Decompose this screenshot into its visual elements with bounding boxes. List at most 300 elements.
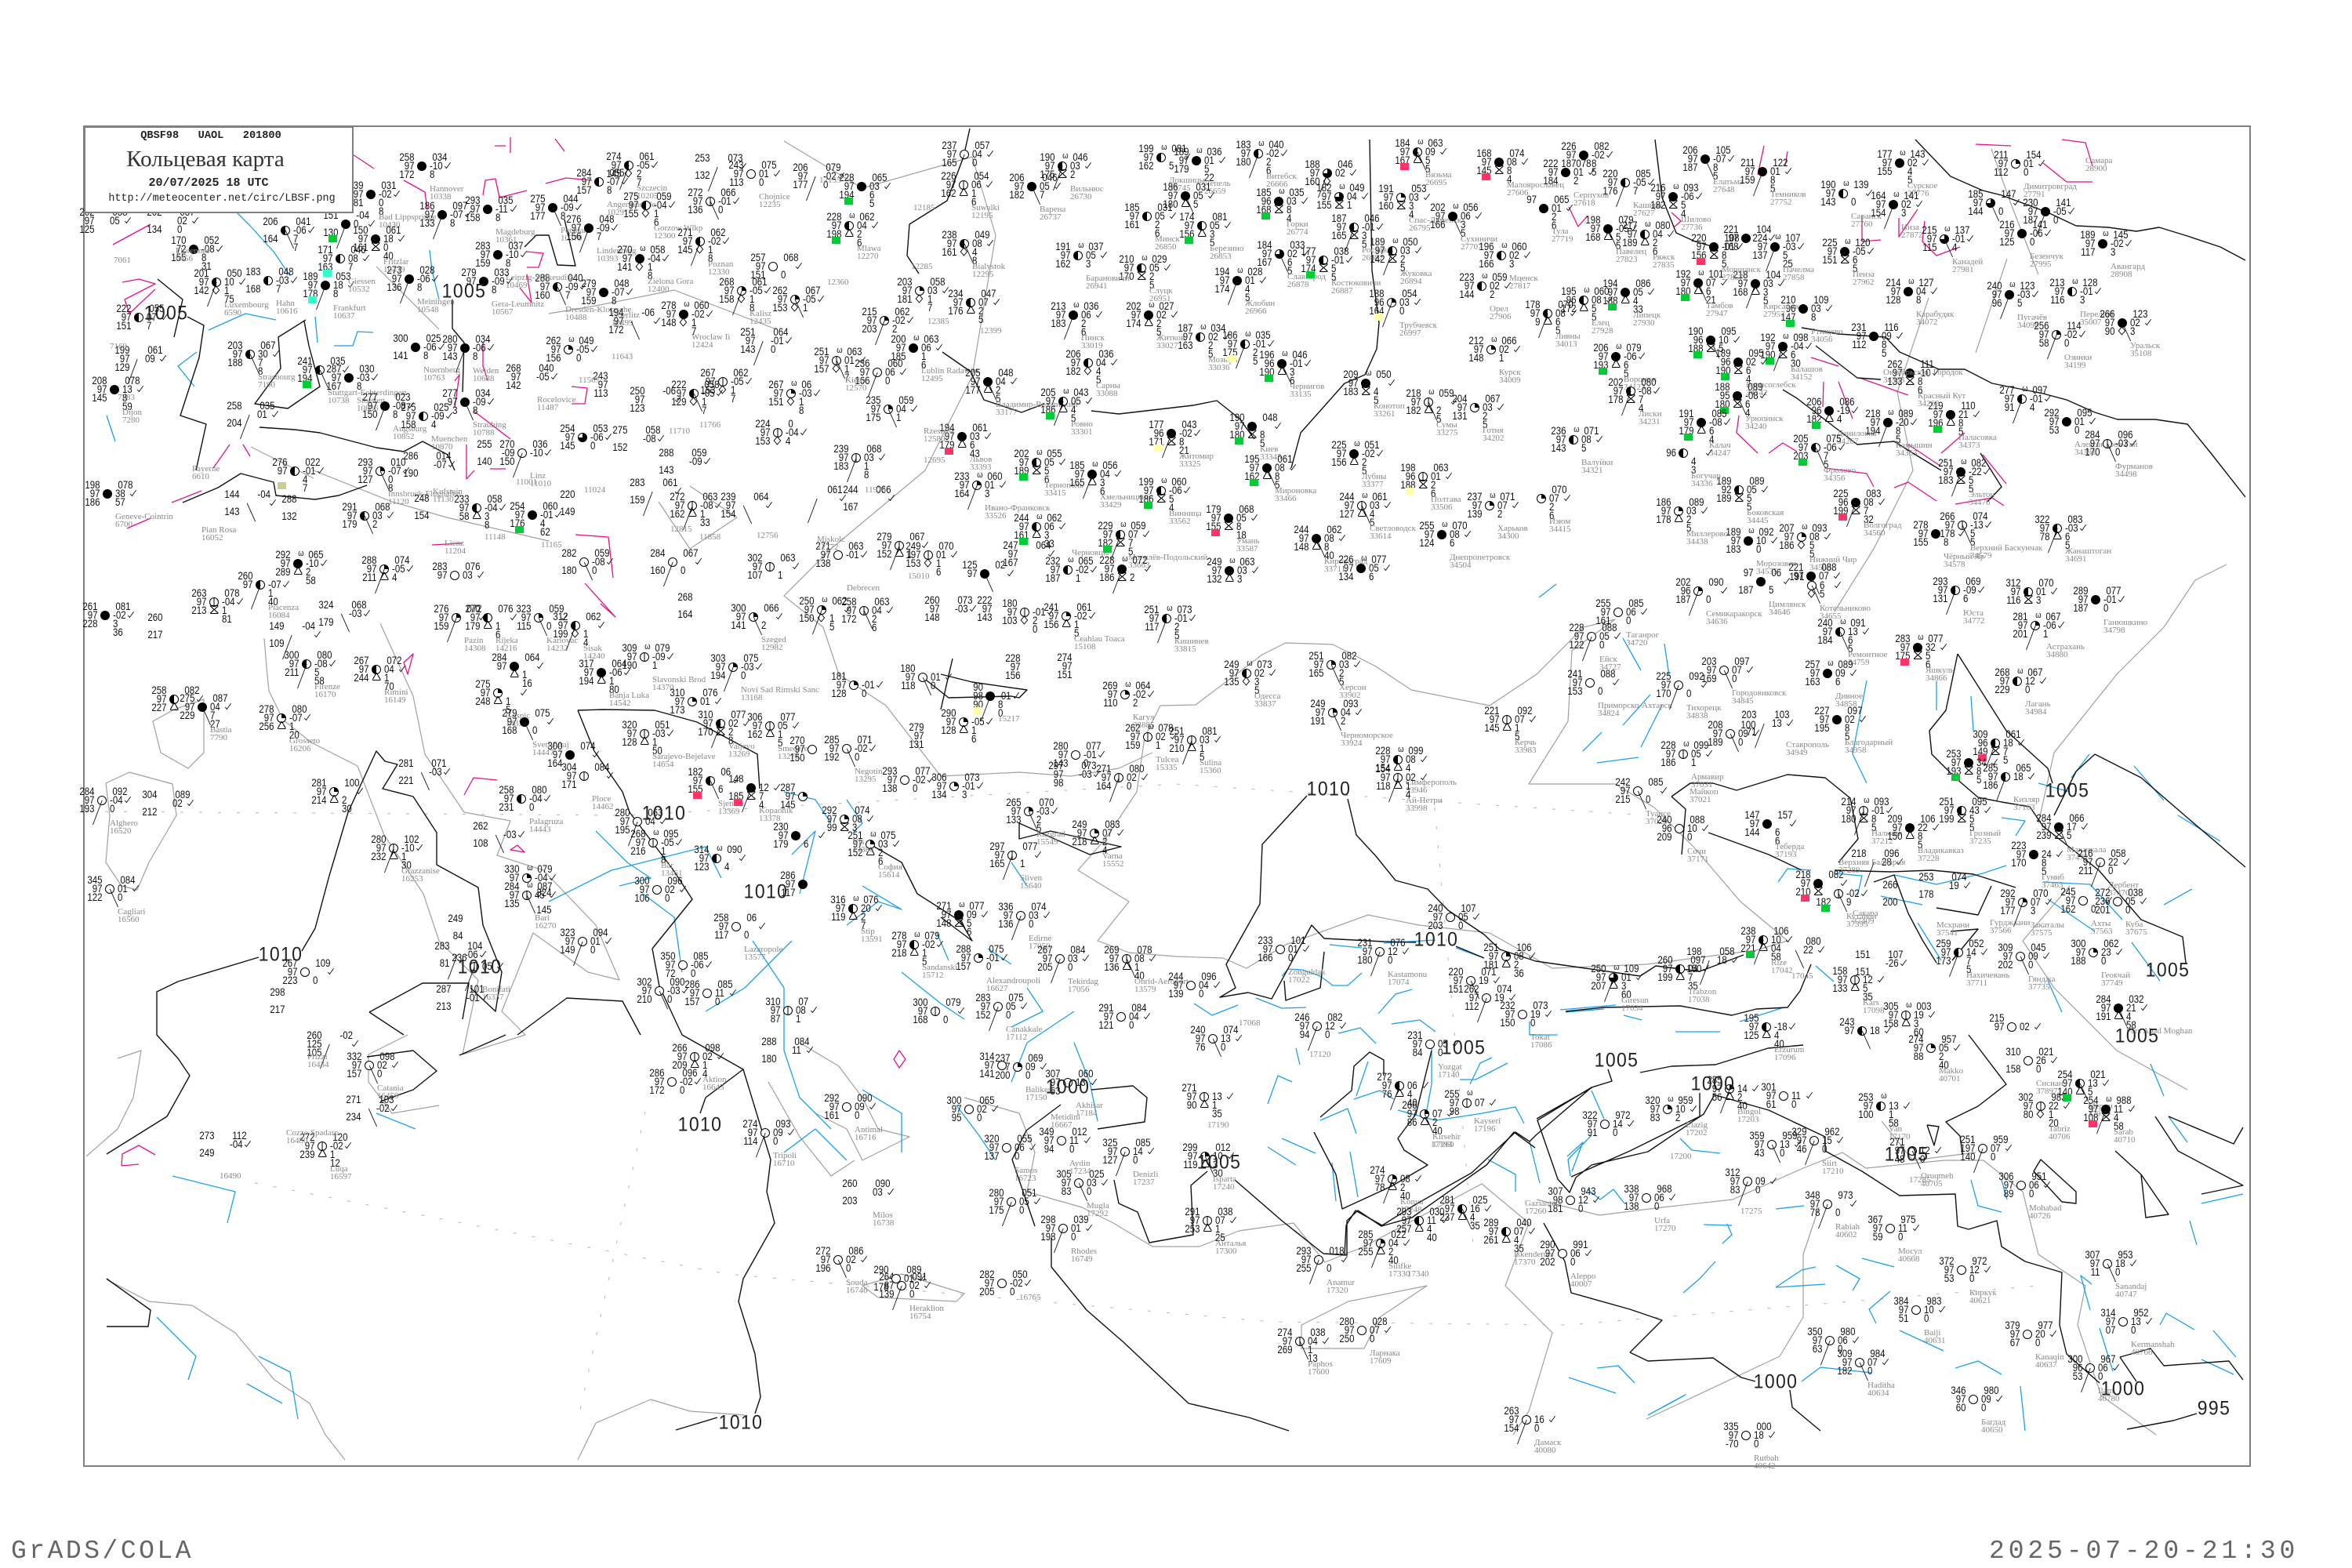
station plots: central Europe: 143: [741, 343, 756, 355]
station plots: Turkey, Caucasus and Middle East: 04: [1388, 1237, 1399, 1249]
station plots: Poland, Belarus, Ukraine: 055: [1047, 448, 1062, 459]
station plots: Balkans and Mediterranean: Одесса: [1254, 691, 1280, 701]
station plots: Poland, Belarus, Ukraine: 065: [1078, 555, 1094, 567]
station plots: Balkans and Mediterranean: Bastia: [210, 725, 232, 735]
station plots: Turkey, Caucasus and Middle East: 16749: [1071, 1254, 1093, 1264]
station plots: Poland, Belarus, Ukraine: 97: [1482, 156, 1492, 168]
station plots: central Europe: 10688: [473, 374, 494, 383]
station plots: Balkans and Mediterranean: 083: [1105, 818, 1120, 830]
station plots: Russia: Яшкуль: [1926, 666, 1955, 675]
station plots: Russia: 6: [1791, 349, 1795, 361]
station plots: Poland, Belarus, Ukraine: 97: [1061, 249, 1071, 261]
station plots: Russia: 070: [1558, 299, 1573, 310]
station plots: Russia: 220: [1692, 232, 1707, 244]
station plots: Balkans and Mediterranean: 300: [731, 602, 746, 614]
station plots: Poland, Belarus, Ukraine: -01: [846, 549, 859, 561]
station plots: Balkans and Mediterranean: -01: [1033, 606, 1046, 618]
station plots: Turkey, Caucasus and Middle East: 127: [1103, 1154, 1118, 1166]
station plots: Balkans and Mediterranean: 7: [759, 790, 764, 802]
station plots: Turkey, Caucasus and Middle East: 983: [1926, 1295, 1942, 1307]
station plots: Balkans and Mediterranean: Alexandroupoli: [986, 976, 1040, 985]
station plots: Russia: 080: [1641, 376, 1657, 388]
station plots: Balkans and Mediterranean: 248: [476, 695, 491, 707]
station plots: Turkey, Caucasus and Middle East: 0: [1613, 1127, 1617, 1138]
station plots: Russia: 37289: [1838, 866, 1860, 875]
station plots: Turkey, Caucasus and Middle East: 288: [762, 1036, 777, 1047]
station plots: Russia: 003: [1916, 1000, 1932, 1012]
station plots: Turkey, Caucasus and Middle East: 346: [1951, 1385, 1966, 1396]
station plots: Russia: 107: [1785, 232, 1801, 244]
station plots: Balkans and Mediterranean: 148: [937, 917, 952, 929]
station plots: Russia: 7: [1639, 394, 1643, 405]
station plots: Russia: 0: [2028, 959, 2033, 971]
station plots: Balkans and Mediterranean: Rijeka: [495, 636, 518, 645]
station plots: Turkey, Caucasus and Middle East: 08: [1400, 1173, 1410, 1185]
station plots: central Europe: -10: [506, 249, 519, 260]
station plots: Turkey, Caucasus and Middle East: 959: [1782, 1130, 1798, 1142]
station plots: Balkans and Mediterranean: 270: [790, 735, 805, 746]
station plots: Russia: 34824: [1598, 709, 1620, 718]
station plots: Poland, Belarus, Ukraine: 33036: [1208, 363, 1229, 372]
station plots: Russia: Городовиковск: [1732, 688, 1786, 698]
station plots: Russia: 97: [1530, 307, 1541, 319]
station plots: Russia: -09: [1963, 584, 1976, 596]
station plots: central Europe: 289: [276, 566, 291, 578]
station plots: Turkey, Caucasus and Middle East: -02: [330, 1140, 343, 1152]
station plots: Balkans and Mediterranean: 232: [372, 851, 387, 862]
station plots: Turkey, Caucasus and Middle East: Heraklion: [909, 1304, 944, 1313]
station plots: Turkey, Caucasus and Middle East: 97: [1588, 1118, 1598, 1130]
station plots: Russia: 27627: [1633, 209, 1654, 218]
station plots: Russia: -03: [2115, 437, 2129, 449]
station plots: Russia: 097: [2032, 384, 2048, 396]
station plots: central Europe: 075: [761, 159, 777, 171]
station plots: Poland, Belarus, Ukraine: Хмельницкий: [1100, 492, 1151, 502]
station plots: Poland, Belarus, Ukraine: 205: [966, 367, 981, 379]
station plots: central Europe: 241: [298, 355, 313, 367]
station plots: Turkey, Caucasus and Middle East: 4: [1514, 1234, 1519, 1246]
station plots: Russia: 5: [1722, 258, 1726, 270]
station plots: Poland, Belarus, Ukraine: 5: [1400, 262, 1405, 274]
station plots: central Europe: 206: [263, 216, 278, 227]
station plots: Russia: 5: [1809, 539, 1814, 551]
station plots: Balkans and Mediterranean: -01: [466, 992, 480, 1004]
station plots: Balkans and Mediterranean: -02: [913, 774, 926, 786]
station plots: Turkey, Caucasus and Middle East: 17120: [1309, 1050, 1331, 1059]
station plots: Balkans and Mediterranean: -04: [222, 596, 235, 608]
station plots: Russia: 147: [1745, 809, 1760, 821]
station plots: Russia: 5: [1555, 325, 1560, 336]
station plots: Poland, Belarus, Ukraine: Житков: [1156, 333, 1185, 343]
station plots: Poland, Belarus, Ukraine: 15010: [908, 572, 930, 581]
station plots: Balkans and Mediterranean: 080: [532, 784, 547, 796]
station plots: Poland, Belarus, Ukraine: Витебск: [1266, 172, 1297, 181]
station plots: Russia: 5: [1624, 368, 1628, 379]
station plots: Balkans and Mediterranean: 211: [285, 666, 299, 678]
station plots: Balkans and Mediterranean: 3: [113, 618, 118, 630]
station plots: Russia: Гурджаани: [1990, 918, 2031, 927]
station plots: Balkans and Mediterranean: 131: [909, 739, 924, 750]
station plots: Balkans and Mediterranean: 97: [507, 716, 517, 728]
station plots: Turkey, Caucasus and Middle East: 07: [1475, 1097, 1485, 1109]
station plots: Turkey, Caucasus and Middle East: 959: [1993, 1134, 2009, 1145]
station plots: central Europe: 1: [750, 293, 754, 305]
station plots: Turkey, Caucasus and Middle East: 16716: [855, 1133, 877, 1142]
station plots: Turkey, Caucasus and Middle East: 06: [2098, 1362, 2108, 1374]
station plots: Russia: 97: [1688, 153, 1698, 165]
station plots: Russia: 305: [1884, 1000, 1899, 1012]
station plots: central Europe: 272: [688, 187, 703, 198]
station plots: Balkans and Mediterranean: 33902: [1339, 691, 1361, 700]
station plots: Turkey, Caucasus and Middle East: 984: [1870, 1348, 1886, 1359]
station plots: Russia: 095: [1721, 325, 1737, 337]
station plots: Poland, Belarus, Ukraine: 029: [1152, 253, 1167, 265]
station plots: central Europe: 150: [354, 224, 368, 236]
station plots: Turkey, Caucasus and Middle East: 151: [1449, 983, 1464, 995]
station plots: Russia: -01: [2103, 593, 2117, 605]
station plots: Poland, Belarus, Ukraine: 26966: [1245, 307, 1267, 316]
station plots: central Europe: 8: [485, 519, 489, 531]
station plots: central Europe: 97: [466, 275, 477, 287]
station plots: Russia: Калач: [1709, 441, 1731, 450]
station plots: Balkans and Mediterranean: 076: [702, 687, 718, 699]
station plots: central Europe: 97: [347, 510, 358, 521]
station plots: Russia: 0: [1756, 543, 1761, 555]
station plots: Poland, Belarus, Ukraine: 186: [1163, 181, 1178, 193]
station plots: central Europe: 143: [225, 506, 240, 517]
station plots: Turkey, Caucasus and Middle East: 028: [1372, 1316, 1388, 1327]
station plots: central Europe: 10852: [393, 432, 414, 441]
station plots: Russia: 28: [1882, 856, 1892, 868]
station plots: Poland, Belarus, Ukraine: 97: [1337, 448, 1347, 459]
station plots: Russia: 281: [2013, 611, 2028, 622]
station plots: Russia: 101: [1708, 268, 1724, 280]
station plots: Poland, Belarus, Ukraine: 028: [1247, 266, 1263, 278]
station plots: Russia: 062: [2103, 938, 2119, 949]
station plots: Russia: 6: [1709, 425, 1714, 437]
station plots: Poland, Belarus, Ukraine: 3: [1086, 258, 1091, 270]
station plots: Russia: 7: [1688, 971, 1693, 983]
station plots: Turkey, Caucasus and Middle East: 17203: [1737, 1115, 1759, 1124]
station plots: Poland, Belarus, Ukraine: 4: [1507, 173, 1512, 185]
station plots: Poland, Belarus, Ukraine: 12270: [857, 252, 878, 261]
station plots: Russia: 8: [1944, 536, 1948, 548]
station plots: central Europe: 067: [260, 339, 276, 351]
station plots: Russia: 089: [1838, 659, 1853, 670]
station plots: Turkey, Caucasus and Middle East: 025: [1472, 1194, 1488, 1206]
station plots: Russia: Канадей: [1952, 257, 1983, 267]
station plots: Balkans and Mediterranean: 090: [670, 976, 685, 988]
station plots: Balkans and Mediterranean: Sveti Juraj: [532, 740, 569, 750]
station plots: Turkey, Caucasus and Middle East: 012: [1072, 1126, 1087, 1138]
station plots: Russia: 34845: [1732, 696, 1753, 706]
station plots: Russia: 10: [1687, 822, 1697, 834]
station plots: Balkans and Mediterranean: 205: [1038, 961, 1053, 973]
station plots: central Europe: 33: [700, 517, 710, 528]
station plots: central Europe: 1: [691, 317, 696, 328]
station plots: Poland, Belarus, Ukraine: -01: [1290, 358, 1303, 369]
station plots: Turkey, Caucasus and Middle East: 0: [1071, 1231, 1076, 1243]
footer left: GrADS credit: GrADS/COLA: [11, 1537, 194, 1566]
station plots: central Europe: 97: [565, 431, 575, 443]
station plots: Turkey, Caucasus and Middle East: 271: [347, 1094, 361, 1105]
station plots: Balkans and Mediterranean: 269: [1105, 944, 1120, 956]
station plots: Balkans and Mediterranean: 154: [1376, 762, 1391, 774]
station plots: Poland, Belarus, Ukraine: 33562: [1169, 517, 1190, 526]
station plots: central Europe: 97: [756, 260, 766, 272]
station plots: Russia: 0: [2108, 865, 2113, 877]
station plots: Balkans and Mediterranean: 2: [1102, 836, 1107, 848]
station plots: Russia: 188: [1603, 295, 1618, 307]
station plots: Turkey, Caucasus and Middle East: 16459: [377, 1091, 398, 1101]
station plots: Poland, Belarus, Ukraine: 2: [1266, 156, 1271, 168]
station plots: Russia: 37711: [1966, 978, 1987, 988]
station plots: Poland, Belarus, Ukraine: 190: [1230, 412, 1245, 423]
station plots: Turkey, Caucasus and Middle East: 97: [2089, 1103, 2099, 1115]
station plots: Russia: 123: [2132, 308, 2148, 320]
station plots: Russia: 22: [1803, 944, 1813, 956]
station plots: Balkans and Mediterranean: 45: [535, 889, 545, 901]
station plots: Poland, Belarus, Ukraine: 26887: [1331, 286, 1353, 296]
station plots: Poland, Belarus, Ukraine: 212: [1469, 335, 1484, 347]
station plots: Poland, Belarus, Ukraine: 07: [1128, 528, 1138, 540]
station plots: central Europe: 08: [348, 252, 358, 264]
station plots: central Europe: 302: [748, 552, 763, 564]
station plots: Russia: 97: [1900, 641, 1911, 653]
station plots: central Europe: 8: [388, 482, 393, 494]
station plots: Poland, Belarus, Ukraine: 12580: [924, 434, 946, 444]
station plots: Balkans and Mediterranean: 05: [482, 960, 492, 972]
station plots: Turkey, Caucasus and Middle East: 97: [305, 1140, 315, 1152]
station plots: central Europe: 050: [227, 267, 242, 279]
station plots: Poland, Belarus, Ukraine: 210: [1120, 253, 1134, 265]
station plots: Russia: 061: [2005, 728, 2021, 740]
station plots: Balkans and Mediterranean: 13388: [852, 845, 873, 855]
station plots: Turkey, Caucasus and Middle East: 13: [1221, 1033, 1231, 1044]
station plots: Balkans and Mediterranean: 5: [1339, 676, 1344, 688]
station plots: Balkans and Mediterranean: 059: [549, 603, 564, 615]
station plots: Turkey, Caucasus and Middle East: 06: [1570, 1247, 1581, 1259]
station plots: Poland, Belarus, Ukraine: 33325: [1179, 459, 1201, 469]
station plots: Balkans and Mediterranean: Varna: [1102, 851, 1123, 861]
station plots: Poland, Belarus, Ukraine: 184: [1396, 137, 1410, 149]
station plots: Turkey, Caucasus and Middle East: 40621: [1969, 1296, 1991, 1305]
station plots: Poland, Belarus, Ukraine: 156: [1180, 228, 1195, 240]
station plots: Russia: 0: [1732, 673, 1737, 684]
station plots: Balkans and Mediterranean: 4: [1102, 844, 1107, 856]
station plots: central Europe: 010: [390, 456, 406, 468]
station plots: Balkans and Mediterranean: 079: [537, 863, 553, 875]
station plots: Russia: 5: [2042, 866, 2046, 877]
station plots: central Europe: 113: [730, 176, 744, 188]
station plots: central Europe: 1: [708, 244, 713, 256]
station plots: Poland, Belarus, Ukraine: 04: [996, 376, 1006, 387]
station plots: Turkey, Caucasus and Middle East: 40: [1737, 1100, 1748, 1112]
station plots: Poland, Belarus, Ukraine: 180: [1236, 156, 1251, 168]
station plots: Turkey, Caucasus and Middle East: 02: [977, 1103, 987, 1115]
station plots: Turkey, Caucasus and Middle East: -02: [376, 1102, 390, 1114]
station plots: Russia: 08: [1592, 294, 1602, 306]
station plots: Balkans and Mediterranean: 1: [1020, 858, 1025, 869]
station plots: Russia: 28900: [2085, 164, 2107, 173]
station plots: Balkans and Mediterranean: 97: [504, 793, 514, 804]
station plots: Turkey, Caucasus and Middle East: 40: [1939, 1059, 1949, 1071]
station plots: Balkans and Mediterranean: 350: [661, 950, 676, 962]
station plots: Poland, Belarus, Ukraine: 11976: [865, 485, 886, 495]
station plots: central Europe: 7280: [122, 416, 140, 425]
station plots: central Europe: 12815: [670, 524, 691, 534]
station plots: Russia: 168: [1733, 286, 1748, 298]
station plots: Russia: 0: [1738, 736, 1743, 748]
station plots: Russia: 085: [1635, 168, 1651, 180]
station plots: Balkans and Mediterranean: 062: [832, 595, 848, 607]
station plots: Poland, Belarus, Ukraine: 239: [834, 443, 849, 455]
station plots: Russia: Нальчик: [1871, 829, 1902, 838]
station plots: Poland, Belarus, Ukraine: 237: [942, 140, 957, 151]
station plots: Balkans and Mediterranean: 90: [973, 681, 983, 693]
station plots: Russia: 97: [1893, 822, 1903, 833]
station plots: Russia: 4: [1952, 241, 1957, 253]
station plots: Turkey, Caucasus and Middle East: 94: [1044, 1143, 1054, 1155]
station plots: Russia: 34560: [1809, 563, 1831, 572]
station plots: central Europe: 58: [306, 575, 316, 586]
station plots: Poland, Belarus, Ukraine: 02: [1490, 280, 1500, 292]
station plots: central Europe: 062: [710, 227, 726, 238]
station plots: Poland, Belarus, Ukraine: 148: [1294, 541, 1309, 553]
station plots: Turkey, Caucasus and Middle East: 17022: [1288, 975, 1309, 985]
station plots: Russia: 09: [1882, 330, 1892, 342]
station plots: Poland, Belarus, Ukraine: 1: [907, 548, 912, 560]
station plots: Russia: 185: [1969, 188, 1984, 200]
station plots: Poland, Belarus, Ukraine: Lublin Radawiec: [921, 366, 980, 376]
station plots: Balkans and Mediterranean: 070: [1039, 797, 1054, 808]
station plots: Russia: 083: [2067, 514, 2083, 525]
station plots: Russia: 6: [1775, 826, 1780, 838]
station plots: Poland, Belarus, Ukraine: Харьков: [1497, 524, 1528, 533]
station plots: Turkey, Caucasus and Middle East: 16723: [1014, 1174, 1036, 1183]
station plots: Russia: 177: [1878, 148, 1893, 160]
station plots: Balkans and Mediterranean: 227: [152, 702, 167, 713]
station plots: Russia: 058: [2111, 848, 2126, 859]
station plots: Russia: 08: [1555, 307, 1566, 319]
station plots: central Europe: 194: [609, 307, 624, 318]
station plots: central Europe: 12300: [654, 231, 676, 241]
station plots: Russia: 34691: [2065, 554, 2087, 564]
station plots: Poland, Belarus, Ukraine: 244: [1294, 524, 1309, 535]
station plots: Turkey, Caucasus and Middle East: 0: [1780, 1147, 1784, 1159]
station plots: Balkans and Mediterranean: 1: [522, 669, 527, 681]
station plots: Russia: 089: [1689, 496, 1704, 508]
station plots: Balkans and Mediterranean: 01: [931, 671, 941, 683]
station plots: Balkans and Mediterranean: 1: [922, 947, 927, 959]
station plots: Turkey, Caucasus and Middle East: 97: [677, 1051, 688, 1062]
station plots: Poland, Belarus, Ukraine: 043: [1181, 419, 1197, 430]
station plots: Balkans and Mediterranean: 4: [1406, 762, 1410, 774]
station plots: Russia: 35007: [2080, 318, 2101, 327]
station plots: Russia: 97: [1656, 191, 1666, 202]
station plots: Balkans and Mediterranean: 151: [1058, 669, 1073, 681]
station plots: Turkey, Caucasus and Middle East: 0: [855, 1109, 859, 1121]
station plots: central Europe: 31: [201, 260, 212, 272]
station plots: Poland, Belarus, Ukraine: 43: [970, 448, 980, 459]
station plots: Turkey, Caucasus and Middle East: 237: [996, 1052, 1011, 1064]
station plots: Balkans and Mediterranean: -03: [503, 829, 517, 840]
station plots: Russia: 04: [1688, 963, 1698, 975]
station plots: Russia: 97: [1663, 963, 1673, 975]
station plots: Russia: Кизляр: [2013, 795, 2040, 804]
station plots: Russia: 5: [1853, 263, 1857, 274]
station plots: central Europe: 8: [495, 212, 500, 223]
station plots: Poland, Belarus, Ukraine: 06: [1461, 210, 1471, 222]
station plots: Turkey, Caucasus and Middle East: 0: [1327, 1262, 1331, 1274]
station plots: Turkey, Caucasus and Middle East: 084: [794, 1036, 810, 1047]
station plots: Turkey, Caucasus and Middle East: 76: [1196, 1041, 1206, 1053]
station plots: Poland, Belarus, Ukraine: 97: [1425, 528, 1435, 540]
station plots: Russia: Астрахань: [2046, 642, 2085, 652]
station plots: Poland, Belarus, Ukraine: 6: [1431, 488, 1436, 499]
station plots: central Europe: Florennes: [176, 246, 209, 256]
station plots: central Europe: 97: [774, 387, 784, 399]
station plots: Russia: 158: [1833, 965, 1848, 977]
station plots: Poland, Belarus, Ukraine: 01: [1204, 154, 1214, 166]
station plots: central Europe: 12235: [759, 200, 781, 209]
station plots: Russia: 139: [1853, 179, 1869, 191]
station plots: Turkey, Caucasus and Middle East: 17193: [1431, 1140, 1452, 1149]
station plots: Poland, Belarus, Ukraine: 03: [1399, 296, 1410, 308]
station plots: Russia: 156: [1692, 249, 1707, 261]
station plots: Balkans and Mediterranean: 13591: [861, 935, 883, 944]
station plots: Poland, Belarus, Ukraine: Днепропетровск: [1450, 553, 1510, 562]
station plots: central Europe: 250: [630, 385, 645, 397]
station plots: Russia: 077: [2106, 585, 2122, 597]
station plots: Balkans and Mediterranean: 13579: [1134, 985, 1156, 994]
station plots: central Europe: 97: [367, 563, 377, 575]
station plots: Balkans and Mediterranean: 16149: [384, 695, 406, 705]
station plots: Balkans and Mediterranean: 051: [655, 719, 670, 731]
station plots: Balkans and Mediterranean: Szeged: [761, 635, 786, 644]
station plots: Balkans and Mediterranean: 97: [906, 671, 916, 683]
station plots: Russia: 5: [1969, 813, 1974, 825]
station plots: Russia: 97: [2076, 946, 2086, 958]
station plots: Russia: 97: [2090, 437, 2100, 449]
station plots: Russia: Ганюшкино: [2103, 618, 2147, 627]
station plots: Balkans and Mediterranean: 288: [956, 943, 971, 955]
station plots: Balkans and Mediterranean: 5: [967, 917, 971, 929]
station plots: Russia: Димитровград: [2024, 182, 2077, 191]
station plots: Poland, Belarus, Ukraine: 255: [1420, 520, 1435, 532]
station plots: Russia: 4: [2126, 1011, 2131, 1022]
station plots: Russia: 5: [1616, 231, 1621, 243]
isobar value labels: 1000: [2101, 1378, 2145, 1400]
station plots: Balkans and Mediterranean: 096: [667, 875, 683, 887]
station plots: Turkey, Caucasus and Middle East: Мосул: [1898, 1247, 1922, 1256]
station plots: central Europe: Strasbourg: [258, 372, 295, 382]
station plots: Poland, Belarus, Ukraine: 198: [827, 228, 842, 240]
station plots: central Europe: 10499: [612, 318, 633, 328]
station plots: central Europe: Szczecin: [637, 183, 667, 193]
station plots: Balkans and Mediterranean: 1: [778, 728, 782, 740]
station plots: Russia: -06: [1624, 350, 1637, 362]
station plots: Poland, Belarus, Ukraine: 2: [978, 305, 983, 317]
station plots: Poland, Belarus, Ukraine: 046: [1364, 212, 1380, 224]
station plots: Russia: Урюпинск: [1745, 414, 1783, 423]
station plots: Balkans and Mediterranean: 1: [971, 724, 976, 736]
station plots: Russia: 086: [1635, 278, 1651, 289]
station plots: Russia: 97: [1758, 241, 1768, 252]
isobar value labels: 1010: [744, 881, 788, 903]
station plots: central Europe: 274: [607, 151, 622, 162]
station plots: Balkans and Mediterranean: 267: [283, 957, 298, 969]
